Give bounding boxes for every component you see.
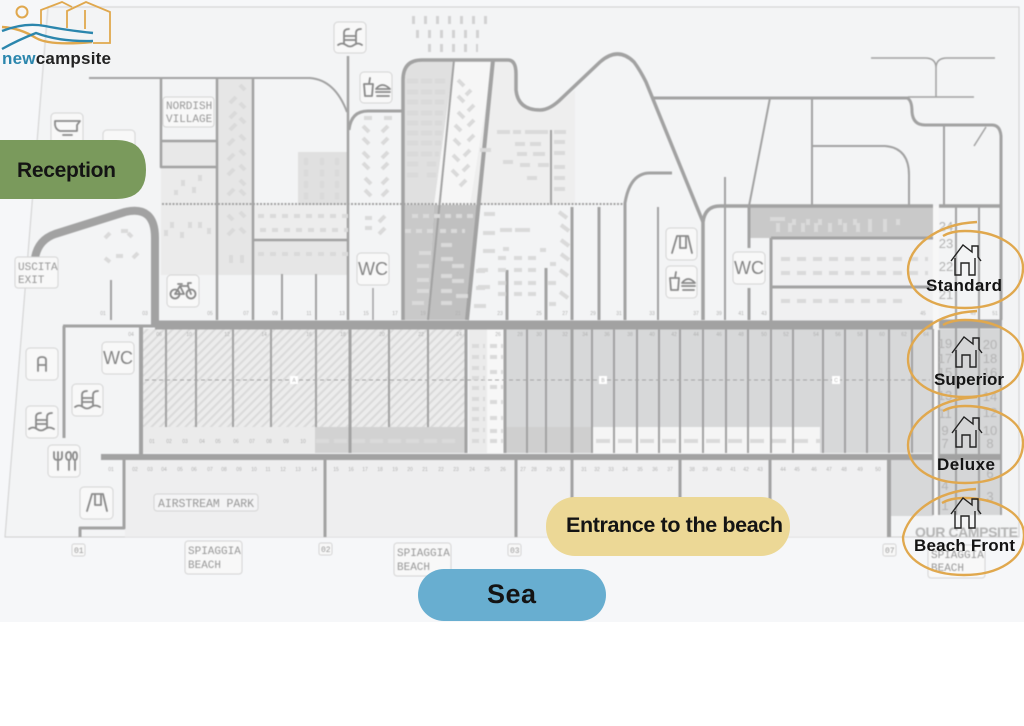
plot numbers: 07	[207, 467, 213, 473]
label: Spiaggia Beach 2: BEACH	[397, 562, 430, 574]
plot numbers: 15	[333, 467, 339, 473]
icon: pool inner	[72, 384, 103, 416]
plot numbers: 11	[306, 311, 312, 317]
legend: Standard	[908, 222, 1023, 308]
right column numbers: 12	[983, 405, 997, 420]
icon: swing centre	[666, 228, 697, 260]
plot numbers: 19	[420, 311, 426, 317]
plot numbers	[100, 311, 998, 473]
plot numbers: 29	[590, 311, 596, 317]
plot numbers: 14	[311, 467, 317, 473]
plot numbers: 27	[562, 311, 568, 317]
beach access numbers	[72, 543, 896, 556]
plot numbers: 51	[992, 311, 998, 317]
plot numbers: 48	[841, 467, 847, 473]
plot numbers: 41	[738, 311, 744, 317]
plot numbers: A	[292, 378, 296, 384]
icon: swing lower	[80, 487, 113, 519]
plot numbers: 17	[392, 311, 398, 317]
icon: WC	[357, 253, 389, 285]
right column numbers: 7	[941, 436, 949, 451]
right column numbers	[938, 219, 997, 513]
plot numbers: 44	[693, 332, 699, 338]
plot numbers: 22	[418, 332, 424, 338]
right column numbers: 9	[941, 423, 949, 438]
icon: drink and burger top	[360, 72, 392, 103]
icon: drink and burger centre	[666, 266, 697, 298]
logo sun	[16, 6, 28, 18]
plot numbers: 05	[177, 467, 183, 473]
plot numbers: 06	[233, 439, 239, 445]
plot numbers: 30	[536, 332, 542, 338]
plot numbers: 03	[182, 439, 188, 445]
plot numbers: 39	[702, 467, 708, 473]
legend: Deluxe	[908, 397, 1023, 483]
plot numbers: C	[834, 378, 838, 384]
plot numbers: 48	[738, 332, 744, 338]
plot numbers: 36	[604, 332, 610, 338]
upper small pitches	[412, 20, 490, 48]
label: Spiaggia Beach 2	[394, 543, 451, 576]
callout: Entrance to the beach: Entrance to the beach	[566, 513, 783, 537]
right column numbers: 15	[938, 365, 952, 380]
plot numbers: 11	[265, 467, 271, 473]
plot numbers: 40	[649, 332, 655, 338]
plot numbers: 49	[970, 311, 976, 317]
label: Spiaggia Beach 1: SPIAGGIA	[188, 546, 241, 558]
icon: pool top	[334, 22, 366, 53]
plot numbers: 04	[199, 439, 205, 445]
plot numbers: 10	[186, 332, 192, 338]
plot numbers: 46	[716, 332, 722, 338]
plot numbers: 03	[142, 311, 148, 317]
legend: Standard: Standard	[926, 276, 1002, 295]
beach access numbers: 03	[510, 547, 520, 556]
plot numbers: 54	[813, 332, 819, 338]
plot numbers: 23	[453, 467, 459, 473]
plot numbers: 26	[495, 332, 501, 338]
plot numbers: 07	[249, 439, 255, 445]
plot numbers: 13	[339, 311, 345, 317]
plot numbers: 35	[637, 467, 643, 473]
plot numbers: 06	[156, 332, 162, 338]
plot numbers: 17	[362, 467, 368, 473]
plot numbers: 62	[901, 332, 907, 338]
plot numbers: 39	[716, 311, 722, 317]
callout: Reception	[0, 140, 146, 199]
pitch cells	[105, 80, 928, 441]
plot numbers: 38	[689, 467, 695, 473]
plot numbers: 28	[531, 467, 537, 473]
plot numbers: 40	[716, 467, 722, 473]
icon: WC right: WC	[734, 258, 764, 278]
plot numbers: 06	[191, 467, 197, 473]
plot numbers: 24	[469, 467, 475, 473]
plot numbers: 41	[730, 467, 736, 473]
plot numbers: 09	[272, 311, 278, 317]
icon: restaurant	[48, 445, 80, 477]
plot numbers: 13	[295, 467, 301, 473]
plot numbers: 43	[761, 311, 767, 317]
plot numbers: 26	[500, 467, 506, 473]
beach access numbers: 02	[321, 546, 331, 555]
legend: Deluxe: Deluxe	[937, 455, 995, 474]
plot numbers: 37	[693, 311, 699, 317]
plot numbers: 12	[280, 467, 286, 473]
plot numbers: 08	[266, 439, 272, 445]
icon: A block	[26, 348, 58, 380]
callout: Sea: Sea	[487, 579, 537, 609]
plot numbers: 31	[581, 467, 587, 473]
label: Uscita Exit: USCITA	[18, 262, 58, 274]
plot numbers: 01	[108, 467, 114, 473]
plot numbers: 45	[794, 467, 800, 473]
label: Uscita Exit	[15, 257, 58, 288]
plot numbers: 18	[340, 332, 346, 338]
plot numbers: 52	[783, 332, 789, 338]
plot numbers: 20	[379, 332, 385, 338]
label: Spiaggia Beach 1	[185, 541, 242, 574]
plot numbers: 03	[147, 467, 153, 473]
plot numbers: 10	[251, 467, 257, 473]
plot numbers: 33	[608, 467, 614, 473]
callout: Entrance to the beach	[546, 497, 790, 556]
right column numbers: 14	[983, 389, 997, 404]
right column numbers: 3	[986, 489, 994, 504]
plot numbers: 64	[923, 332, 929, 338]
label: Uscita Exit: EXIT	[18, 275, 45, 287]
right column numbers: 17	[938, 351, 952, 366]
icon: WC right	[733, 252, 765, 284]
right column numbers: 8	[986, 436, 994, 451]
plot numbers: 08	[221, 467, 227, 473]
plot numbers: 31	[616, 311, 622, 317]
plot numbers: 25	[484, 467, 490, 473]
plot numbers: 21	[455, 311, 461, 317]
label: Spiaggia Beach 3: BEACH	[931, 563, 964, 575]
plot numbers: 20	[407, 467, 413, 473]
plot numbers: 56	[835, 332, 841, 338]
label: Our Campsite: OUR CAMPSITE	[915, 524, 1018, 540]
plot numbers: 21	[422, 467, 428, 473]
label: Nordish Village: NORDISH	[166, 101, 212, 113]
label: Spiaggia Beach 3	[928, 545, 985, 578]
plot numbers: 22	[438, 467, 444, 473]
plot numbers: 25	[536, 311, 542, 317]
callout: Reception: Reception	[17, 159, 116, 182]
map ground	[5, 7, 1019, 537]
label: Spiaggia Beach 2: SPIAGGIA	[397, 548, 450, 560]
plot numbers: 27	[520, 467, 526, 473]
plot numbers: 10	[300, 439, 306, 445]
beach access numbers: 01	[74, 547, 84, 556]
right column numbers: 23	[939, 236, 953, 251]
callout: Sea	[418, 569, 606, 621]
icon: bicycle	[167, 275, 199, 307]
right column numbers: 20	[983, 337, 997, 352]
icon: hidden box behind reception	[103, 130, 135, 162]
plot numbers: 42	[743, 467, 749, 473]
right column numbers: 16	[983, 365, 997, 380]
plot numbers: 04	[161, 467, 167, 473]
plot numbers: 30	[559, 467, 565, 473]
beach access numbers: 07	[885, 547, 895, 556]
right column numbers: 10	[983, 423, 997, 438]
logo waves	[2, 25, 93, 49]
label: Airstream Park: AIRSTREAM PARK	[158, 498, 254, 511]
panel: campsite map	[5, 7, 1019, 578]
plot numbers: 16	[348, 467, 354, 473]
right column numbers: 6	[986, 466, 994, 481]
plot numbers: 45	[920, 311, 926, 317]
zones: shaded pitch areas	[125, 60, 1000, 537]
plot numbers: 14	[261, 332, 267, 338]
plot numbers: 05	[207, 311, 213, 317]
plot numbers: 34	[582, 332, 588, 338]
legend: Superior	[908, 311, 1023, 397]
plot numbers: 60	[879, 332, 885, 338]
right column numbers: 11	[938, 406, 952, 421]
plot numbers: 44	[780, 467, 786, 473]
plot numbers: 09	[236, 467, 242, 473]
label: Spiaggia Beach 3: SPIAGGIA	[931, 550, 984, 562]
logo wordmark: newcampsite	[2, 49, 111, 68]
icon: camper	[51, 113, 83, 145]
icon: WC lower left	[102, 342, 134, 374]
right column numbers: 19	[938, 336, 952, 351]
icon: WC lower left: WC	[103, 348, 133, 368]
right column numbers: 21	[939, 287, 953, 302]
right column numbers: 18	[983, 351, 997, 366]
plot numbers: 32	[594, 467, 600, 473]
plot numbers: 23	[497, 311, 503, 317]
plot numbers: 07	[243, 311, 249, 317]
plot numbers: 37	[667, 467, 673, 473]
plot numbers: 02	[132, 467, 138, 473]
plot numbers: 15	[363, 311, 369, 317]
plot numbers: 32	[562, 332, 568, 338]
logo	[2, 2, 111, 68]
icon: pool outer	[26, 406, 58, 438]
plot numbers: 09	[283, 439, 289, 445]
plot numbers: 24	[456, 332, 462, 338]
plot numbers: 19	[392, 467, 398, 473]
legend: Superior: Superior	[934, 370, 1004, 389]
right column numbers: 4	[941, 478, 949, 493]
plot numbers: 33	[649, 311, 655, 317]
plot numbers: 46	[811, 467, 817, 473]
plot numbers: 50	[875, 467, 881, 473]
logo houses	[41, 2, 110, 43]
plot numbers: 01	[100, 311, 106, 317]
plot numbers: 12	[224, 332, 230, 338]
plot numbers: 58	[857, 332, 863, 338]
plot numbers: 16	[306, 332, 312, 338]
legend: Beach Front: Beach Front	[914, 536, 1015, 555]
plot numbers: 04	[128, 332, 134, 338]
plot numbers: 42	[671, 332, 677, 338]
right column numbers: 13	[938, 388, 952, 403]
plot numbers: 47	[826, 467, 832, 473]
label: Spiaggia Beach 1: BEACH	[188, 560, 221, 572]
plot numbers: 01	[149, 439, 155, 445]
plot numbers: 49	[857, 467, 863, 473]
label: Nordish Village	[163, 97, 214, 127]
plot numbers: 50	[761, 332, 767, 338]
roads	[35, 54, 1001, 537]
plot numbers: B	[601, 378, 605, 384]
icon: WC: WC	[358, 259, 388, 279]
plot numbers: 18	[377, 467, 383, 473]
plot numbers: 36	[652, 467, 658, 473]
right column numbers: 24	[939, 219, 953, 234]
right column numbers: 1	[941, 498, 949, 513]
plot numbers: 05	[215, 439, 221, 445]
plot numbers: 38	[627, 332, 633, 338]
legend: Beach Front	[903, 489, 1024, 575]
plot numbers: 28	[517, 332, 523, 338]
plot numbers: 29	[546, 467, 552, 473]
label: Nordish Village: VILLAGE	[166, 114, 213, 126]
plot numbers: 34	[622, 467, 628, 473]
right column numbers: 22	[939, 259, 953, 274]
plot numbers: 02	[166, 439, 172, 445]
plot numbers: 43	[757, 467, 763, 473]
